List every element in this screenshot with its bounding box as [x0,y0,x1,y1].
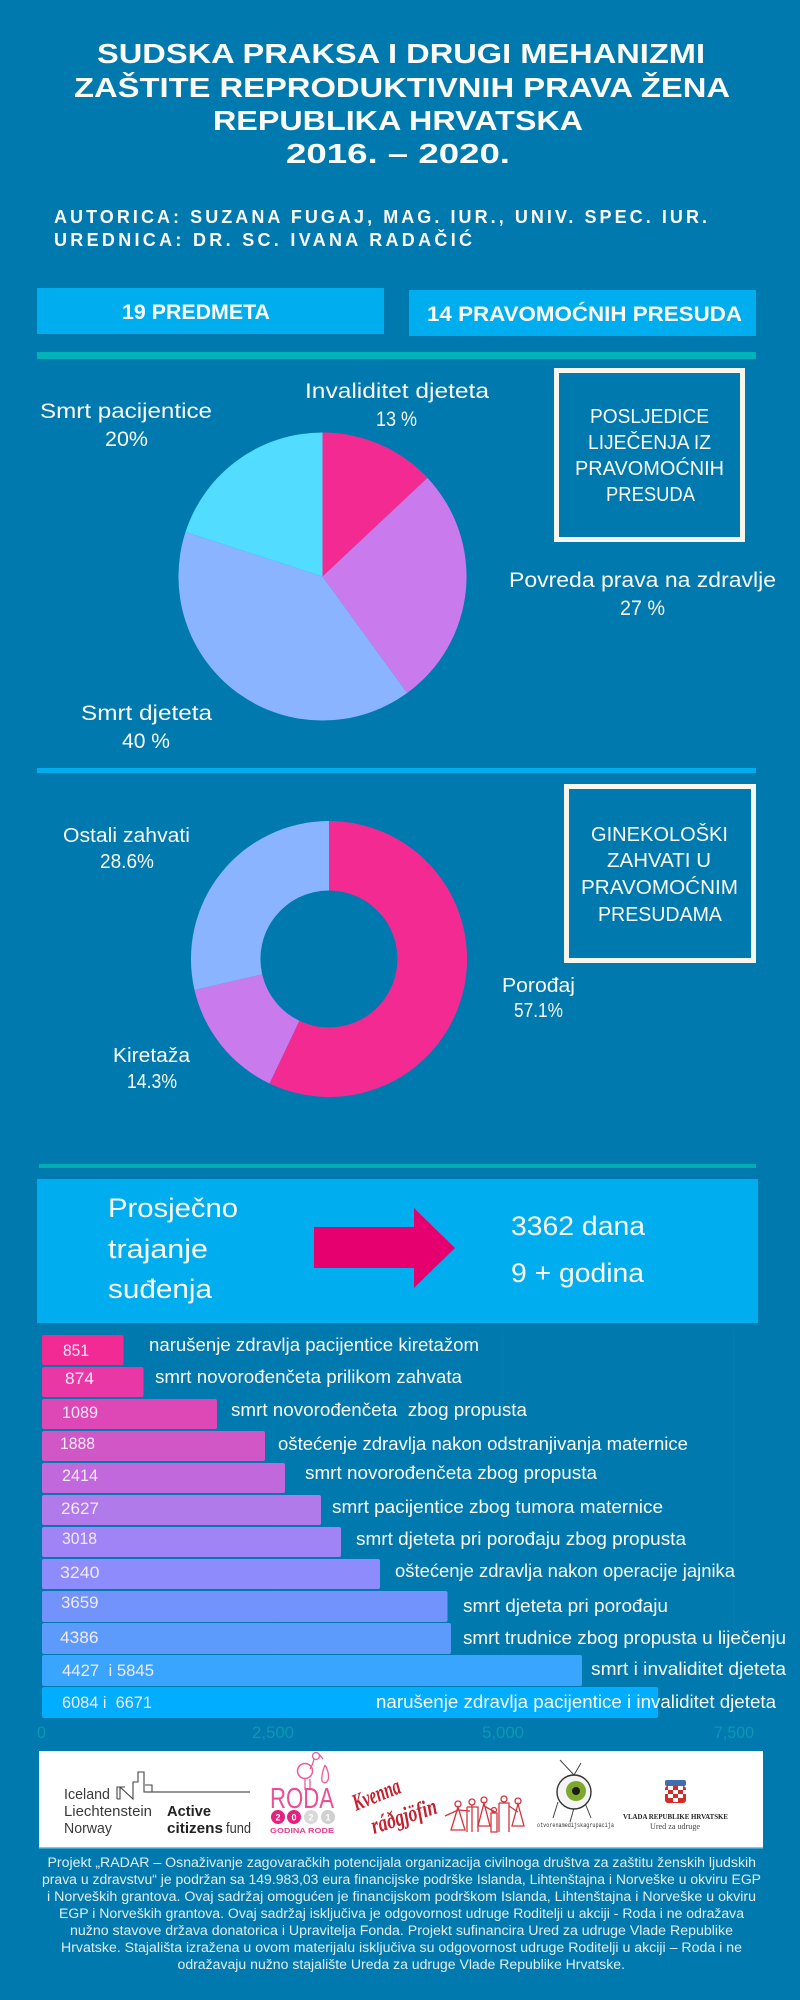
donut label: ostali zahvati: 28.6% [100,851,154,873]
bar: 851: 851 [63,1341,89,1360]
bar: 874: 874 [65,1369,94,1388]
logo strip [39,1751,763,1848]
text: 3362 dana, 9+ godina [511,1211,646,1288]
bar: 3240: 3240 [60,1563,100,1582]
pie label: smrt pacijentice: Smrt pacijentice [40,400,212,423]
chart axis labels: 5,000 [482,1723,524,1742]
logo: active citizens fund: Iceland [64,1786,110,1803]
framed heading: ginekološki zahvati: GINEKOLOŠKI [591,823,728,846]
framed heading: posljedice liječenja: PRESUDA [606,484,696,506]
footer disclaimer text: Hrvatske. Stajališta izražena u ovom materijalu isključiva su odgovornost udruge Roditelji u akciji – Roda i ne [61,1940,742,1955]
footer disclaimer text: prava u zdravstvu“ je podržan sa 149.983,03 eura financijske podrške Islanda, Lihtenštajna i Norveške u okviru EGP [42,1872,761,1887]
bar: 2414: smrt novorođenčeta zbog propusta [305,1463,598,1483]
title: ZAŠTITE REPRODUKTIVNIH PRAVA ŽENA [74,71,730,103]
logo: vlada republike hrvatske: VLADA REPUBLIKE HRVATSKE [623,1812,728,1821]
pie label: invaliditet djeteta: 13 % [376,408,417,431]
bar: 851 [42,1335,479,1365]
donut label: ostali zahvati: Ostali zahvati [63,825,190,847]
pie label: invaliditet djeteta: Invaliditet djeteta [305,380,489,403]
arrow [314,1208,455,1288]
text: 3362 dana, 9+ godina: 9 + godina [511,1258,645,1288]
stat box: 19 predmeta [37,288,384,334]
bar: 2627 [42,1495,663,1525]
bar: 3018: 3018 [62,1529,97,1548]
logo: active citizens fund: Norway [64,1820,112,1837]
bar: 2627: 2627 [61,1499,99,1518]
stat box: 14 pravomoćnih presuda [409,290,756,336]
donut label: porođaj: Porođaj [502,975,575,997]
chart axis labels: 2,500 [252,1723,294,1742]
logo: roda 2021: 2 [308,1812,314,1822]
pie label: smrt djeteta: 40 % [122,730,170,753]
text: prosječno trajanje suđenja: trajanje [108,1234,208,1264]
stat box: 14 pravomoćnih presuda: 14 PRAVOMOĆNIH PRESUDA [427,302,742,326]
bar: 6084 i 6671: narušenje zdravlja pacijentice i invaliditet djeteta [376,1692,777,1712]
footer disclaimer text: Projekt „RADAR – Osnaživanje zagovaračkih potencijala organizacija civilnoga društva za zaštitu ženskih ljudskih [48,1855,756,1870]
bar: 3659: 3659 [61,1593,98,1612]
logo: roda 2021: GODINA RODE [270,1826,334,1835]
pie label: smrt pacijentice [40,400,212,451]
bar: 3018: smrt djeteta pri porođaju zbog propusta [356,1529,687,1549]
logo: otvorena medijska grupacija [537,1760,614,1829]
framed heading: ginekološki zahvati [566,786,754,960]
chart axis labels: 7,500 [714,1723,754,1742]
bar: 874 [42,1367,463,1397]
bar: 2414 [42,1463,598,1493]
bar: 4427 i 5845: smrt i invaliditet djeteta [591,1659,787,1679]
stat box: 19 predmeta: 19 PREDMETA [122,301,270,324]
bar: 1888 [42,1431,688,1461]
bar: 1089: 1089 [62,1403,98,1422]
title: SUDSKA PRAKSA I DRUGI MEHANIZMI [97,38,705,69]
bar: 3659: smrt djeteta pri porođaju [463,1596,668,1616]
framed heading: ginekološki zahvati: PRAVOMOĆNIM [581,876,738,899]
donut label: kiretaža: 14.3% [127,1071,177,1093]
donut label: porođaj: 57.1% [514,1000,563,1022]
logo: kvenna ráðgjöfin: ráðgjöfin [368,1794,441,1840]
framed heading: posljedice liječenja [556,370,742,540]
donut label: kiretaža: Kiretaža [113,1045,191,1067]
bar: 4386: 4386 [60,1628,98,1647]
logo: roda 2021: 0 [292,1812,297,1822]
bar: 1888: 1888 [60,1434,95,1453]
footer disclaimer text: i Norveških grantova. Ovaj sadržaj omogućen je financijskom podrškom Islanda, Lihtenštajna i Norveške u okviru [47,1889,756,1904]
panel: prosječno trajanje suđenja [37,1179,758,1323]
bar: 3018 [42,1527,687,1557]
logo: active citizens fund: citizens [167,1820,223,1837]
donut chart: ginekološki zahvati [191,821,467,1097]
bar: 3659 [42,1591,668,1622]
framed heading: posljedice liječenja: POSLJEDICE [590,406,709,428]
pie label: povreda prava na zdravlje: Povreda prava na zdravlje [509,569,776,592]
bar: 2414: 2414 [62,1466,98,1485]
logo: active citizens fund: fund [226,1820,251,1837]
bar: 3240: oštećenje zdravlja nakon operacije jajnika [395,1561,736,1581]
bar: 4427 i 5845: 4427 i 5845 [62,1661,154,1680]
logo: vlada republike hrvatske: Ured za udruge [650,1822,700,1831]
logo: active citizens fund [64,1772,251,1837]
bar: 4386: smrt trudnice zbog propusta u liječenju [463,1628,786,1648]
bar: 851: narušenje zdravlja pacijentice kiretažom [149,1335,479,1355]
bar: 6084 i 6671 [42,1687,777,1718]
bar: 4386 [42,1623,786,1654]
logo: kvenna ráðgjöfin [348,1774,441,1840]
authors: UREDNICA: DR. SC. IVANA RADAČIĆ [54,229,472,250]
footer disclaimer text: EGP i Norveških grantova. Ovaj sadržaj isključiva je odgovornost udruge Roditelji u akciji - Roda i ne odražava [59,1906,745,1921]
bar: 1089 [42,1399,528,1429]
text: 3362 dana, 9+ godina: 3362 dana [511,1211,646,1241]
pie label: smrt pacijentice: 20% [105,428,148,451]
chart axis labels: 0 [37,1723,46,1742]
logo: active citizens fund: Liechtenstein [64,1803,152,1820]
title: 2016. – 2020. [286,138,510,169]
title: REPUBLIKA HRVATSKA [213,105,583,136]
bar: 4427 i 5845 [42,1655,787,1686]
bar: 1089: smrt novorođenčeta zbog propusta [231,1400,528,1420]
footer disclaimer text: nužno stavove država donatorica i Upravitelja Fonda. Projekt sufinancira Ured za udruge Vlade Republike [70,1923,733,1938]
logo: roda 2021 [270,1752,335,1835]
logo: vlada republike hrvatske [623,1780,728,1831]
pie label: smrt djeteta [81,702,212,753]
logo: roda 2021: RODA [270,1783,334,1815]
pie chart: posljedice liječenja [178,432,467,721]
framed heading: posljedice liječenja: PRAVOMOĆNIH [575,457,724,480]
footer disclaimer text [42,1855,761,1972]
text: prosječno trajanje suđenja: Prosječno [108,1193,238,1223]
logo: kvenna ráðgjöfin: Kvenna [348,1774,405,1817]
bar: 6084 i 6671: 6084 i 6671 [62,1693,152,1712]
authors [54,207,707,250]
bar: 3240 [42,1559,736,1589]
framed heading: ginekološki zahvati: ZAHVATI U [607,850,711,872]
donut label: kiretaža [113,1045,191,1093]
bar: 874: smrt novorođenčeta prilikom zahvata [155,1367,463,1387]
authors: AUTORICA: SUZANA FUGAJ, MAG. IUR., UNIV. SPEC. IUR. [54,207,707,227]
bar chart: trajanje postupaka [42,1330,787,1722]
pie label: povreda prava na zdravlje: 27 % [620,597,665,620]
text: prosječno trajanje suđenja [108,1193,238,1304]
text: prosječno trajanje suđenja: suđenja [108,1274,213,1304]
donut label: porođaj [502,975,575,1022]
framed heading: ginekološki zahvati: PRESUDAMA [598,904,723,926]
logo: family figures [445,1796,524,1832]
logo: roda 2021: 2 [276,1812,281,1822]
chart axis labels [37,1723,754,1742]
bar: 2627: smrt pacijentice zbog tumora maternice [332,1497,663,1517]
framed heading: posljedice liječenja: LIJEČENJA IZ [588,431,711,454]
pie label: smrt djeteta: Smrt djeteta [81,702,212,725]
pie label: povreda prava na zdravlje [509,569,776,620]
bar: 1888: oštećenje zdravlja nakon odstranjivanja maternice [278,1434,688,1454]
donut label: ostali zahvati [63,825,190,873]
pie label: invaliditet djeteta [305,380,489,431]
logo: roda 2021: 1 [326,1812,331,1822]
title [74,38,730,169]
logo: active citizens fund: Active [167,1803,211,1820]
footer disclaimer text: odražavaju nužno stajalište Ureda za udruge Vlade Republike Hrvatske. [178,1957,625,1972]
logo: otvorena medijska grupacija: otvorenamedijskagrupacija [537,1822,614,1829]
